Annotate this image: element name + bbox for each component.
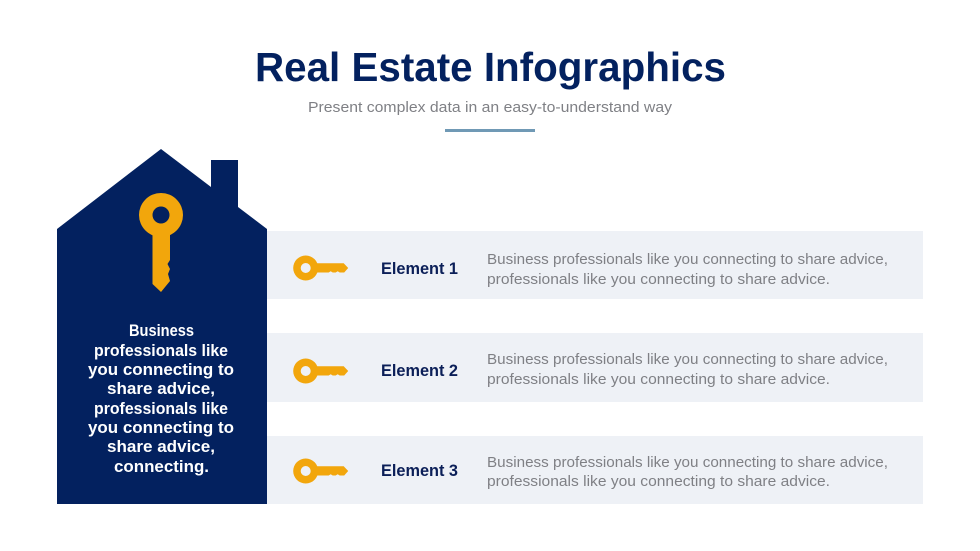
row 1 description: professionals like you connecting to share advice.	[487, 271, 830, 288]
row 2 description: professionals like you connecting to share advice.	[487, 371, 830, 388]
panel: house	[57, 149, 267, 504]
row 2 description	[487, 351, 888, 388]
row 1 heading: Element 1	[381, 259, 458, 278]
icon: row 1 key	[293, 256, 348, 280]
house description: connecting.	[114, 458, 209, 476]
icon: row 2 key	[293, 358, 348, 384]
panel: row 3	[267, 436, 923, 504]
house description: you connecting to	[88, 419, 234, 437]
house description: share advice,	[107, 438, 215, 456]
subtitle: Present complex data in an easy-to-understand way	[308, 99, 673, 116]
panel: row 2	[267, 333, 923, 402]
row 3 description: Business professionals like you connecting to share advice,	[487, 454, 888, 471]
row 2 heading: Element 2	[381, 361, 458, 380]
house description: Business	[129, 322, 194, 340]
house description: professionals like	[94, 400, 228, 418]
row 1 description: Business professionals like you connecting to share advice,	[487, 251, 888, 268]
icon: large key	[139, 193, 183, 292]
panel: row 1	[267, 231, 923, 299]
row 2 background	[267, 333, 923, 402]
house description: share advice,	[107, 380, 215, 398]
row 3 description: professionals like you connecting to share advice.	[487, 473, 830, 490]
row 1 background	[267, 231, 923, 299]
house description: you connecting to	[88, 361, 234, 379]
row 2 description: Business professionals like you connecting to share advice,	[487, 351, 888, 368]
row 3 background	[267, 436, 923, 504]
title: Real Estate Infographics	[255, 44, 726, 90]
house description	[88, 322, 234, 476]
row 3 description	[487, 454, 888, 490]
row 3 heading: Element 3	[381, 461, 458, 480]
house description: professionals like	[94, 342, 228, 360]
title underline accent	[445, 129, 535, 132]
icon: row 3 key	[293, 458, 348, 484]
house shape	[57, 149, 267, 504]
row 1 description	[487, 251, 888, 288]
